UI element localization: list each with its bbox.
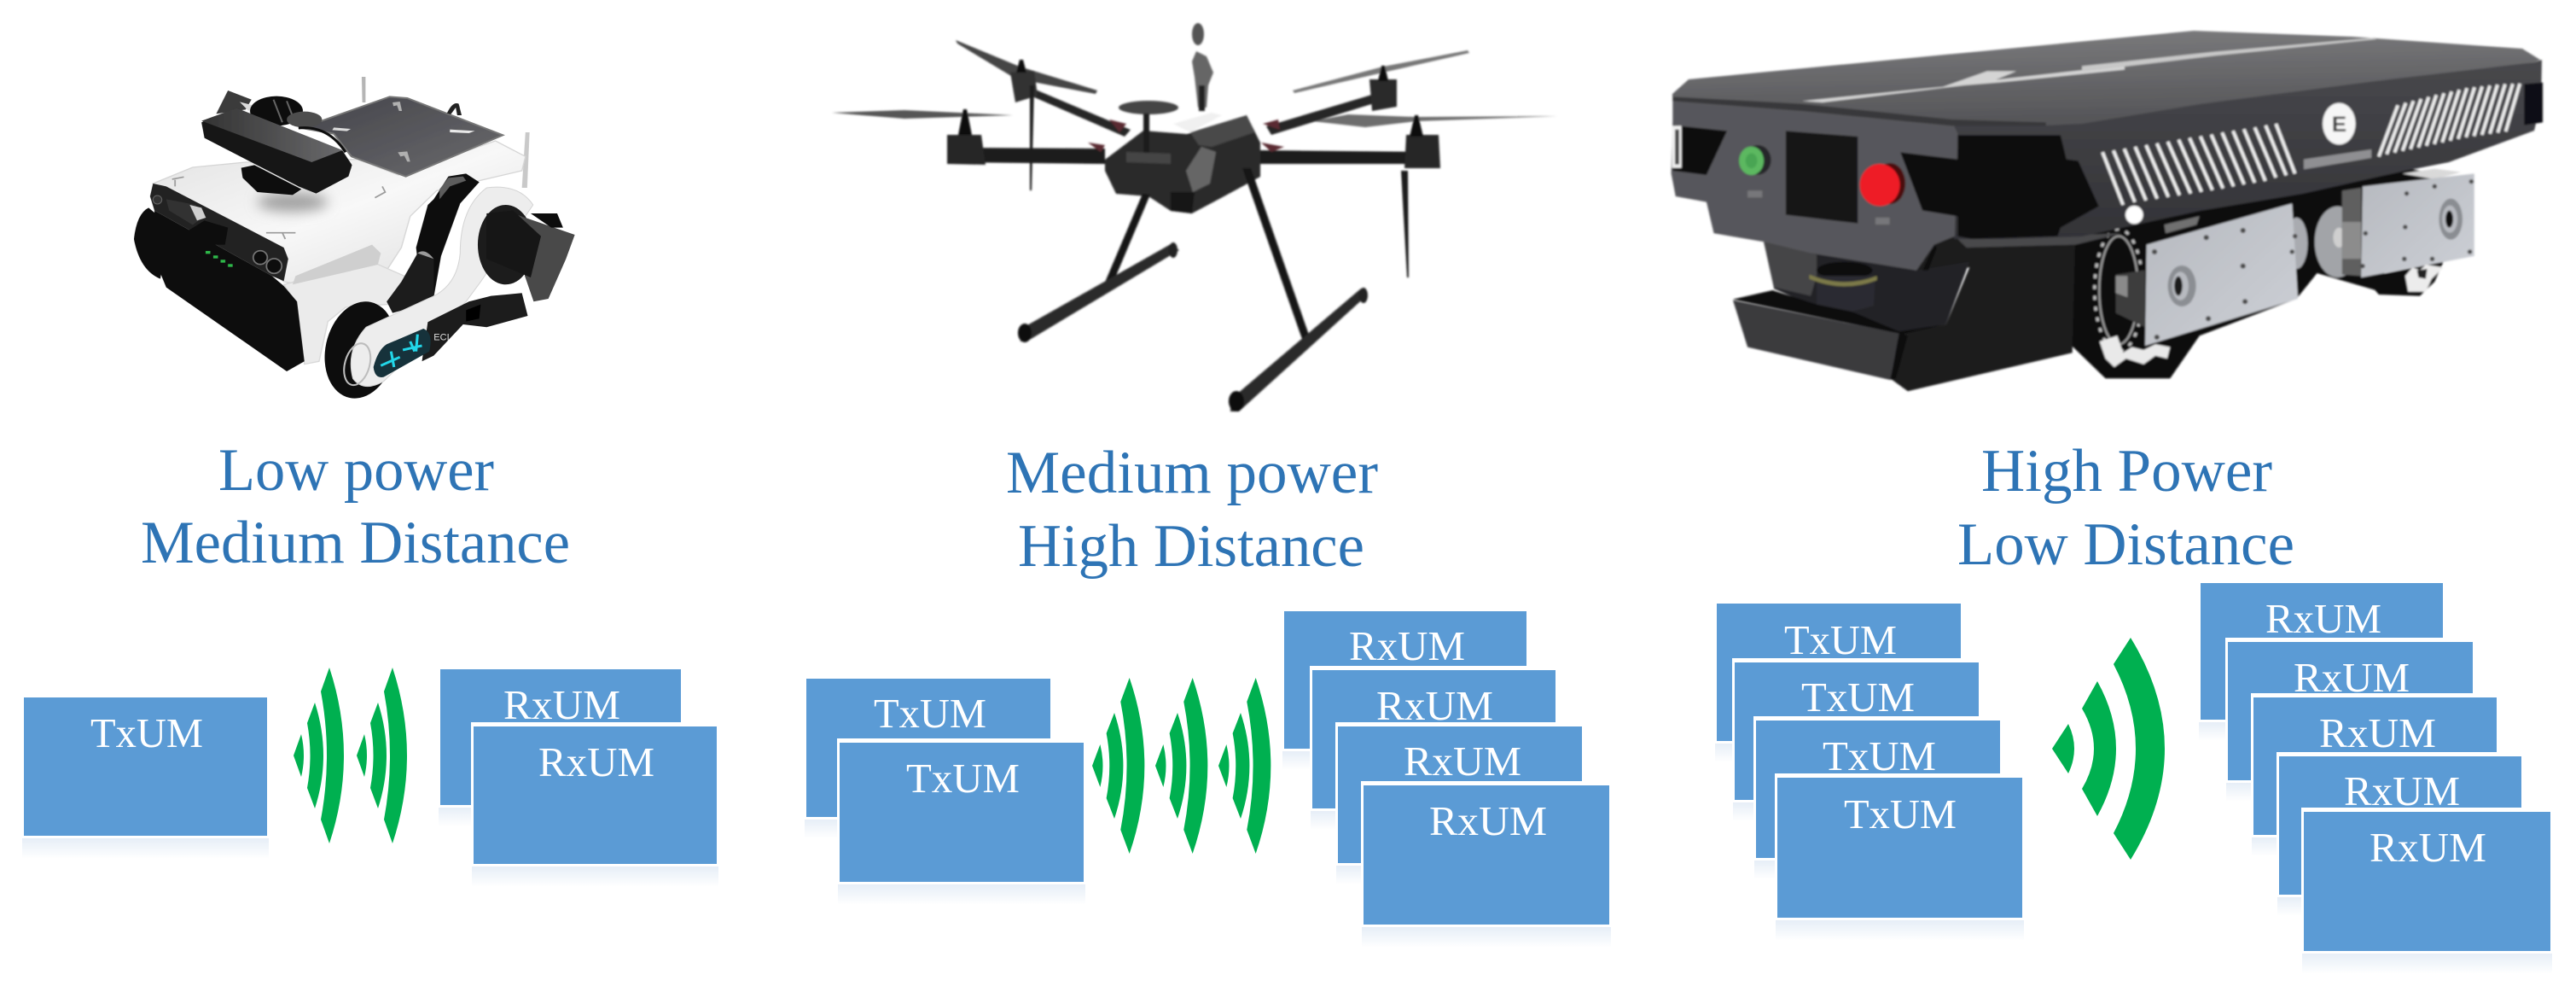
block: RxUM 3 (1335, 722, 1585, 884)
block: TxUM: TxUM (90, 709, 203, 756)
block: RxUM 5 (2301, 808, 2553, 974)
panel: low power link diagram (22, 668, 719, 887)
title: low power medium distance (141, 437, 570, 576)
block: TxUM 1: TxUM (1784, 616, 1897, 663)
block: RxUM 1 (2199, 583, 2445, 741)
icon: signal waves (1092, 678, 1271, 854)
block: TxUM 2: TxUM (906, 755, 1020, 802)
logo: E mark: E (2332, 113, 2346, 137)
platform lower block and tray (1733, 233, 2122, 391)
block: RxUM 2 (2225, 638, 2475, 802)
panel: medium power link diagram (805, 611, 1612, 948)
block: TxUM 3 (1753, 716, 2003, 879)
block: TxUM 4: TxUM (1844, 791, 1957, 837)
title: low power medium distance: Medium Distance (141, 510, 570, 576)
block: RxUM 3 (2251, 693, 2499, 856)
block: RxUM 2 (471, 722, 719, 887)
title: medium power high distance (1006, 440, 1378, 580)
block: RxUM 2: RxUM (1376, 682, 1493, 729)
block: TxUM 1 (805, 679, 1052, 838)
block: TxUM 2 (1732, 658, 1981, 821)
block: TxUM 4 (1775, 773, 2025, 941)
platform vents and logo (2082, 38, 2543, 224)
block: RxUM 4: RxUM (1429, 797, 1547, 844)
block: TxUM 2: TxUM (1801, 674, 1915, 721)
image: medium power hexacopter drone (832, 23, 1557, 411)
block: TxUM 2 (837, 738, 1086, 905)
panel: high power link diagram (1715, 583, 2553, 974)
block: RxUM 4 (1361, 781, 1612, 948)
title: medium power high distance: Medium power (1006, 440, 1378, 506)
block: RxUM 3: RxUM (1404, 738, 1521, 785)
title: high power low distance: High Power (1981, 438, 2272, 505)
title: low power medium distance: Low power (218, 437, 494, 504)
label: ECI badge: ECI (433, 332, 450, 342)
title: high power low distance (1957, 438, 2294, 578)
block: RxUM 2 (1310, 666, 1558, 830)
block: RxUM 1: RxUM (1349, 622, 1465, 669)
block: RxUM 1: RxUM (503, 681, 620, 728)
title: medium power high distance: High Distance (1018, 513, 1364, 580)
block: RxUM 2: RxUM (2294, 654, 2410, 701)
block: RxUM 2: RxUM (538, 738, 654, 785)
block: RxUM 4: RxUM (2344, 767, 2460, 814)
block: RxUM 3: RxUM (2319, 709, 2436, 756)
platform side panel (1954, 60, 2542, 239)
platform front panel (1672, 66, 2125, 271)
image: high power omni-wheel platform (1672, 31, 2543, 391)
block: RxUM 5: RxUM (2370, 824, 2486, 871)
block: TxUM 1: TxUM (874, 690, 986, 737)
block: RxUM 1 (439, 669, 683, 826)
platform rear and wheels (2064, 168, 2474, 378)
block: TxUM (22, 697, 269, 859)
platform top face (1672, 31, 2540, 125)
block: RxUM 4 (2277, 752, 2524, 916)
block: TxUM 3: TxUM (1823, 732, 1936, 779)
image: low power tracked robot (134, 77, 575, 405)
block: TxUM 1 (1715, 604, 1963, 762)
block: RxUM 1: RxUM (2265, 595, 2381, 642)
icon: large signal wave (2052, 638, 2165, 860)
block: RxUM 1 (1282, 611, 1528, 770)
title: high power low distance: Low Distance (1957, 511, 2294, 578)
icon: signal waves (294, 668, 407, 843)
